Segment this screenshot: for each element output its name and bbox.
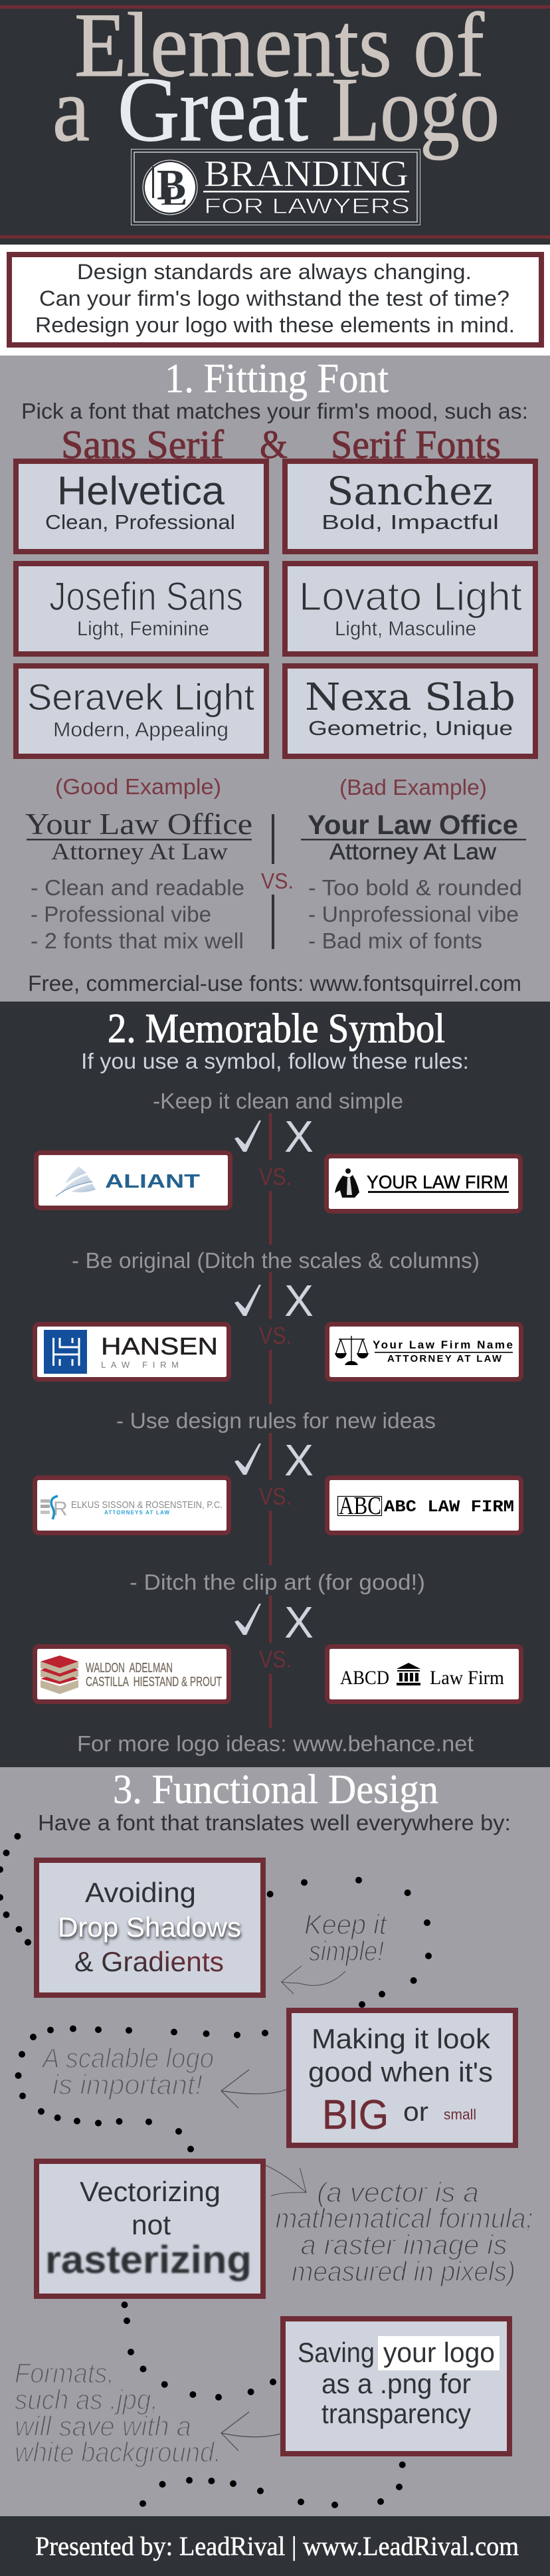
title: a bbox=[52, 58, 90, 160]
footer: Presented by: LeadRival | www.LeadRival.com bbox=[35, 2531, 519, 2561]
icon: X mark 4: X bbox=[284, 1598, 314, 1648]
logo: Branding for Lawyers: B bbox=[157, 161, 186, 209]
good example bbox=[25, 774, 252, 953]
logo: Branding for Lawyers bbox=[132, 149, 420, 225]
note: scalable logo: is important! bbox=[52, 2069, 203, 2100]
logo: Branding for Lawyers: L bbox=[161, 181, 187, 211]
panel: intro callout bbox=[9, 255, 541, 345]
card: big or small: BIG bbox=[322, 2092, 389, 2138]
bad example: - Too bold & rounded bbox=[308, 875, 522, 900]
logo card: Elkus Sisson and Rosenstein: ELKUS SISSON & ROSENSTEIN, P.C. bbox=[71, 1499, 223, 1511]
bad example: Attorney At Law bbox=[329, 839, 496, 865]
card: Helvetica bbox=[16, 461, 266, 552]
note: vector definition: measured in pixels) bbox=[292, 2256, 515, 2287]
logo card: your law firm with lawyer: YOUR LAW FIRM bbox=[367, 1172, 508, 1192]
icon: X mark 1: X bbox=[284, 1112, 314, 1162]
card: big or small: or bbox=[403, 2097, 428, 2127]
comparison divider 2: VS. bbox=[259, 1322, 292, 1349]
card: vectorizing not rasterizing: rasterizing bbox=[45, 2238, 252, 2282]
card: Seravek Light: Modern, Appealing bbox=[53, 718, 229, 741]
logo card: ABCD law firm: ABCD bbox=[340, 1667, 389, 1689]
logo card: Hansen bbox=[35, 1324, 229, 1380]
card: Nexa Slab: Geometric, Unique bbox=[308, 716, 513, 740]
bad example: (Bad Example) bbox=[339, 775, 487, 800]
logo card: Aliant bbox=[36, 1152, 230, 1208]
icon: X mark 3: X bbox=[284, 1436, 314, 1485]
note: keep it simple: Keep it bbox=[304, 1909, 388, 1940]
note: scalable logo: A scalable logo bbox=[41, 2042, 214, 2074]
text: pick a font: Pick a font that matches your firm's mood, such as: bbox=[21, 399, 528, 423]
title: Great bbox=[118, 58, 308, 160]
card: saving as png: Saving bbox=[298, 2337, 375, 2368]
icon: check mark 4 bbox=[234, 1604, 261, 1635]
note: vector definition: mathematical formula; bbox=[275, 2202, 533, 2234]
divider with VS bbox=[261, 814, 294, 949]
card: big or small: good when it's bbox=[308, 2056, 493, 2088]
good example: - Clean and readable bbox=[31, 875, 244, 900]
logo card: ABC law firm: ABC bbox=[339, 1492, 381, 1520]
logo card: your law firm name with scales: Your Law Firm Name bbox=[373, 1339, 513, 1351]
good example: - 2 fonts that mix well bbox=[31, 928, 244, 953]
card: saving as png: as a .png for bbox=[321, 2368, 471, 2399]
icon: check mark 1 bbox=[234, 1121, 261, 1152]
bad example: - Unprofessional vibe bbox=[308, 902, 519, 926]
card: saving as png: transparency bbox=[321, 2398, 471, 2429]
text: more logo ideas link: For more logo ideas: www.behance.net bbox=[77, 1731, 474, 1756]
title bbox=[52, 0, 500, 160]
icon: check mark 2 bbox=[234, 1285, 261, 1316]
card: Nexa Slab: Nexa Slab bbox=[305, 676, 515, 719]
arrow: to vector note bbox=[266, 2165, 306, 2196]
arrow: to avoiding card bbox=[282, 1966, 345, 1994]
bad example: Your Law Office bbox=[308, 809, 518, 840]
icon: check mark 3 bbox=[234, 1444, 261, 1475]
text: font translates intro: Have a font that translates well everywhere by: bbox=[38, 1810, 511, 1835]
card: Lovato Light: Lovato Light bbox=[299, 574, 522, 619]
card: vectorizing not rasterizing: not bbox=[132, 2209, 171, 2240]
good example: Your Law Office bbox=[25, 807, 252, 841]
logo card: ABCD law firm bbox=[327, 1647, 521, 1701]
comparison divider 4 bbox=[259, 1596, 292, 1728]
good example: (Good Example) bbox=[55, 774, 221, 799]
rule: ditch the clip art: - Ditch the clip art (for good!) bbox=[130, 1570, 425, 1594]
card: Seravek Light: Seravek Light bbox=[27, 676, 254, 718]
card: avoiding drop shadows and gradients bbox=[37, 1860, 263, 1995]
logo card: Hansen: LAW FIRM bbox=[101, 1360, 179, 1370]
logo card: Elkus Sisson and Rosenstein: R bbox=[53, 1498, 68, 1520]
logo card: your law firm name with scales bbox=[327, 1324, 521, 1380]
subheading: sans serif and serif fonts bbox=[61, 423, 501, 467]
footer bbox=[0, 2516, 550, 2576]
logo card: ABCD law firm: Law Firm bbox=[430, 1667, 504, 1689]
card: avoiding drop shadows and gradients: Avoiding bbox=[85, 1877, 196, 1908]
icon: X mark 2: X bbox=[284, 1276, 314, 1326]
card: Seravek Light bbox=[16, 666, 266, 756]
card: vectorizing not rasterizing bbox=[37, 2161, 263, 2296]
logo card: Waldon Adelman: WALDON ADELMAN bbox=[86, 1661, 173, 1675]
card: Josefin Sans: Light, Feminine bbox=[77, 617, 209, 640]
rule: be original: - Be original (Ditch the scales & columns) bbox=[72, 1248, 480, 1273]
card: big or small: Making it look bbox=[312, 2023, 491, 2054]
subheading: sans serif and serif fonts: Serif Fonts bbox=[331, 423, 501, 467]
logo card: your law firm with lawyer bbox=[327, 1156, 521, 1211]
comparison divider 1 bbox=[259, 1113, 292, 1245]
heading: 2. Memorable Symbol: 2. Memorable Symbol bbox=[108, 1006, 445, 1051]
note: vector definition: (a vector is a bbox=[317, 2177, 479, 2208]
note: formats: will save with a bbox=[15, 2411, 191, 2442]
text: free fonts link: Free, commercial-use fonts: www.fontsquirrel.com bbox=[28, 971, 521, 996]
card: Nexa Slab bbox=[285, 666, 535, 756]
panel: header bbox=[0, 0, 550, 245]
note: formats: such as .jpg, bbox=[15, 2384, 158, 2415]
card: Sanchez bbox=[285, 461, 535, 552]
text: symbol rules intro: If you use a symbol, follow these rules: bbox=[81, 1049, 469, 1073]
good example: - Professional vibe bbox=[31, 902, 211, 926]
card: vectorizing not rasterizing: Vectorizing bbox=[80, 2176, 221, 2207]
comparison divider 3: VS. bbox=[259, 1483, 292, 1510]
card: saving as png: your logo bbox=[383, 2337, 495, 2368]
title: Logo bbox=[331, 58, 500, 160]
card: avoiding drop shadows and gradients: Drop Shadows bbox=[58, 1911, 241, 1943]
panel: section 2 memorable symbol bbox=[0, 1002, 550, 1767]
dotted path bbox=[0, 1833, 432, 2508]
panel: section 3 functional design bbox=[0, 1767, 550, 2516]
card: Lovato Light: Light, Masculine bbox=[335, 617, 476, 640]
note: formats: Formats, bbox=[15, 2357, 114, 2389]
logo card: Waldon Adelman bbox=[35, 1647, 229, 1701]
card: Helvetica: Clean, Professional bbox=[45, 510, 235, 534]
logo card: Elkus Sisson and Rosenstein: ATTORNEYS AT LAW bbox=[104, 1510, 169, 1515]
rule: use design rules: - Use design rules for new ideas bbox=[116, 1408, 436, 1433]
arrow: to scalable note bbox=[221, 2070, 286, 2108]
card: Josefin Sans bbox=[16, 564, 266, 654]
heading: 1. Fitting Font: 1. Fitting Font bbox=[165, 356, 389, 401]
logo: Branding for Lawyers: BRANDING bbox=[204, 154, 409, 195]
note: scalable logo bbox=[41, 2042, 214, 2100]
panel: intro callout: Redesign your logo with these elements in mind. bbox=[35, 313, 515, 337]
panel: section 1 fitting font bbox=[0, 356, 550, 1002]
card: big or small bbox=[289, 2010, 515, 2145]
logo card: Hansen: HANSEN bbox=[101, 1333, 218, 1360]
card: avoiding drop shadows and gradients: & Gradients bbox=[74, 1946, 224, 1977]
bad example bbox=[301, 775, 526, 953]
note: formats bbox=[15, 2357, 221, 2468]
subheading: sans serif and serif fonts: & bbox=[260, 423, 288, 467]
note: vector definition: a raster image is bbox=[300, 2229, 507, 2260]
logo card: Aliant: ALIANT bbox=[105, 1171, 200, 1192]
divider with VS: VS. bbox=[261, 869, 294, 893]
logo: Branding for Lawyers: FOR LAWYERS bbox=[204, 194, 410, 218]
logo card: your law firm name with scales: ATTORNEY AT LAW bbox=[387, 1353, 502, 1364]
card: saving as png bbox=[283, 2319, 509, 2454]
note: vector definition bbox=[275, 2177, 533, 2287]
arrow: to formats note bbox=[221, 2412, 280, 2451]
logo card: Elkus Sisson and Rosenstein bbox=[35, 1478, 229, 1533]
logo card: ABC law firm bbox=[327, 1478, 521, 1533]
card: big or small: small bbox=[444, 2106, 476, 2123]
subheading: sans serif and serif fonts: Sans Serif bbox=[61, 423, 224, 467]
logo card: ABC law firm: ABC LAW FIRM bbox=[384, 1497, 514, 1517]
card: Josefin Sans: Josefin Sans bbox=[49, 574, 243, 619]
comparison divider 4: VS. bbox=[259, 1646, 292, 1673]
panel: intro callout: Design standards are always changing. bbox=[77, 260, 472, 284]
logo card: Waldon Adelman: CASTILLA HIESTAND & PROUT bbox=[86, 1675, 222, 1689]
heading: 3. Functional Design: 3. Functional Design bbox=[113, 1767, 438, 1812]
rule: keep it clean: -Keep it clean and simple bbox=[153, 1089, 403, 1113]
comparison divider 1: VS. bbox=[259, 1163, 292, 1190]
bad example: - Bad mix of fonts bbox=[308, 928, 482, 953]
comparison divider 2 bbox=[259, 1272, 292, 1404]
panel: intro callout: Can your firm's logo withstand the test of time? bbox=[39, 286, 509, 310]
note: keep it simple: simple! bbox=[309, 1935, 384, 1967]
card: Helvetica: Helvetica bbox=[57, 469, 225, 513]
note: formats: white background. bbox=[15, 2436, 221, 2468]
note: keep it simple bbox=[304, 1909, 388, 1967]
card: Sanchez: Sanchez bbox=[327, 469, 493, 514]
card: Lovato Light bbox=[285, 564, 535, 654]
good example: Attorney At Law bbox=[51, 838, 228, 865]
comparison divider 3 bbox=[259, 1433, 292, 1565]
card: Sanchez: Bold, Impactful bbox=[321, 510, 499, 534]
